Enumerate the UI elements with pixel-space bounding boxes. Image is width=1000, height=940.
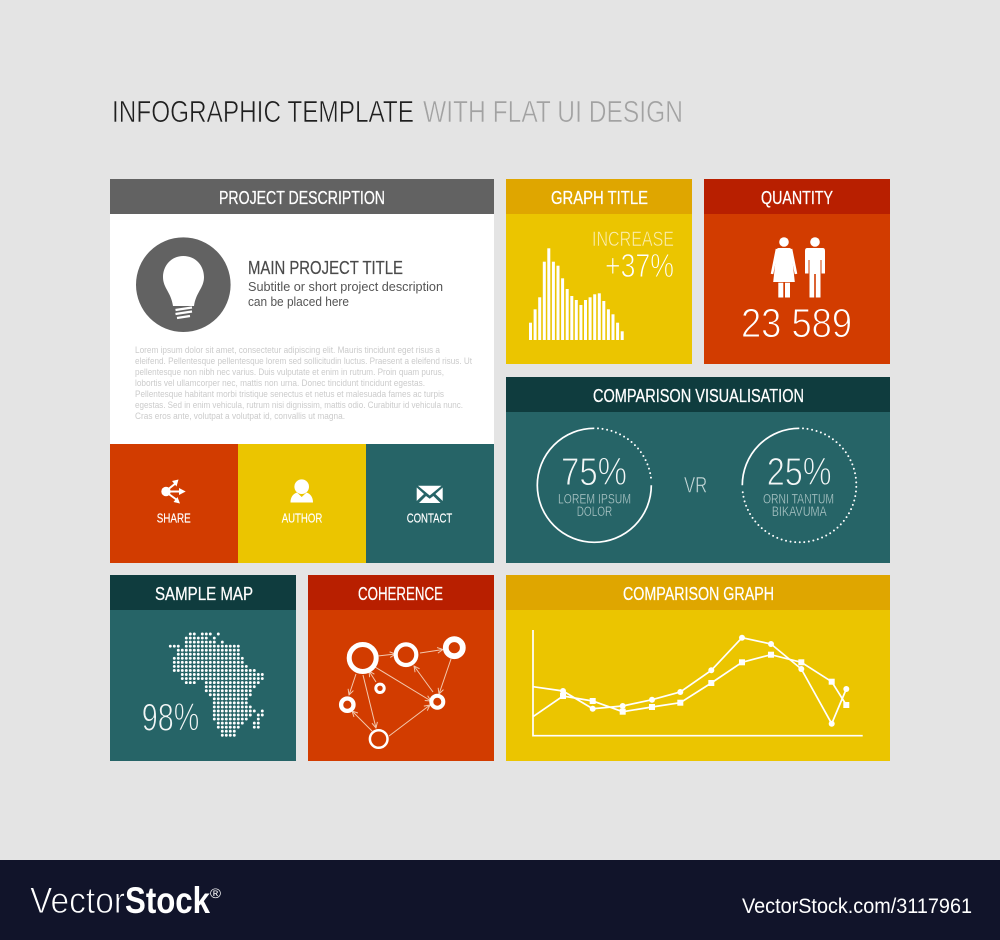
increase value: INCREASE: [592, 228, 674, 251]
panel: sample map: [110, 575, 296, 761]
title: INFOGRAPHIC TEMPLATE: [112, 94, 414, 129]
gauge: 25 percent: 25%: [767, 451, 832, 494]
gauge: 25 percent: BIKAVUMA: [772, 503, 827, 519]
lorem ipsum text block: egestas. Sed in enim vehicula, rutrum nisi dignissim, mattis odio. Curabitur id vehicula nunc.: [135, 400, 463, 411]
heading: sample map: [110, 575, 296, 610]
heading: comparison graph: COMPARISON GRAPH: [623, 584, 774, 604]
quantity number: 23 589: [741, 300, 852, 346]
panel: coherence: [308, 575, 494, 761]
lorem ipsum text block: Pellentesque habitant morbi tristique senectus et netus et malesuada fames ac turpis: [135, 389, 444, 400]
heading: graph title: [506, 179, 692, 214]
map value: 98%: [142, 697, 199, 740]
heading: graph title: GRAPH TITLE: [551, 188, 648, 208]
lorem ipsum text block: Cras eros ante, volutpat a volutpat id, convallis ut magna.: [135, 411, 345, 422]
heading: comparison visualisation: [506, 377, 890, 412]
panel: comparison visualisation: [506, 377, 890, 563]
label: author: AUTHOR: [282, 510, 322, 525]
lorem ipsum text block: eleifend. Pellentesque pellentesque lorem sed sollicitudin luctus. Praesent a eleifend risus. Ut: [135, 356, 472, 367]
project subtitle: Subtitle or short project description: [248, 280, 443, 294]
footer bar: [0, 860, 1000, 940]
gauge: 75 percent: [537, 428, 651, 542]
heading: coherence: [308, 575, 494, 610]
icon: man: [805, 237, 825, 298]
title: [112, 94, 683, 129]
button: share: [110, 444, 238, 563]
network nodes: [341, 639, 463, 748]
panel: comparison graph: [506, 575, 890, 761]
gauge: 75 percent: 75%: [561, 451, 627, 494]
label: share: SHARE: [157, 510, 191, 525]
heading: project description: PROJECT DESCRIPTION: [219, 188, 385, 208]
heading: comparison visualisation: COMPARISON VISUALISATION: [593, 386, 804, 406]
heading: project description: [110, 179, 494, 214]
button: author: [238, 444, 366, 563]
footer logo: Stock: [125, 880, 210, 921]
gauge: 25 percent: ORNI TANTUM: [763, 491, 834, 507]
footer url: VectorStock.com/3117961: [742, 895, 972, 918]
icon: person: [290, 479, 313, 502]
heading: quantity: QUANTITY: [761, 188, 833, 208]
project subtitle: can be placed here: [248, 295, 349, 309]
title: WITH FLAT UI DESIGN: [423, 94, 683, 129]
label: contact: CONTACT: [407, 510, 452, 525]
heading: comparison graph: [506, 575, 890, 610]
network arrows: [349, 650, 451, 736]
gauge: 25 percent: [742, 428, 856, 542]
footer logo: [30, 880, 222, 921]
increase value: +37%: [605, 247, 674, 284]
button: contact: [366, 444, 494, 563]
lorem ipsum text block: pellentesque non nibh nec varius. Duis vulputate et enim in rutrum. Proin quam purus,: [135, 367, 444, 378]
network diagram: [341, 639, 463, 748]
lorem ipsum text block: lobortis vel ullamcorper nec, mattis non urna. Donec tincidunt tincidunt egestas.: [135, 378, 425, 389]
histogram: [529, 248, 624, 340]
gauge: 75 percent: LOREM IPSUM: [558, 491, 631, 507]
icon: share arrows: [161, 480, 186, 504]
icon: envelope: [417, 486, 443, 503]
series: squares: [533, 652, 849, 717]
footer logo: ®: [210, 885, 222, 901]
panel: graph title: [506, 179, 692, 364]
main project title: MAIN PROJECT TITLE: [248, 258, 403, 278]
series: circles: [533, 635, 849, 727]
heading: sample map: SAMPLE MAP: [155, 584, 253, 604]
footer logo: Vector: [30, 880, 125, 921]
project subtitle: [248, 280, 443, 309]
panel: quantity: [704, 179, 890, 364]
versus label: VR: [684, 472, 707, 497]
lorem ipsum text block: Lorem ipsum dolor sit amet, consectetur adipiscing elit. Mauris tincidunt eget risus a: [135, 345, 441, 356]
heading: coherence: COHERENCE: [358, 584, 443, 604]
icon: light bulb: [136, 237, 231, 332]
panel: project description: [110, 179, 494, 444]
gauge: 75 percent: DOLOR: [577, 503, 612, 519]
line chart: [533, 630, 863, 736]
lorem ipsum text block: [135, 345, 472, 422]
increase value: [592, 228, 674, 284]
map: dotted Africa: [170, 634, 262, 735]
heading: quantity: [704, 179, 890, 214]
icon: woman: [772, 237, 796, 298]
